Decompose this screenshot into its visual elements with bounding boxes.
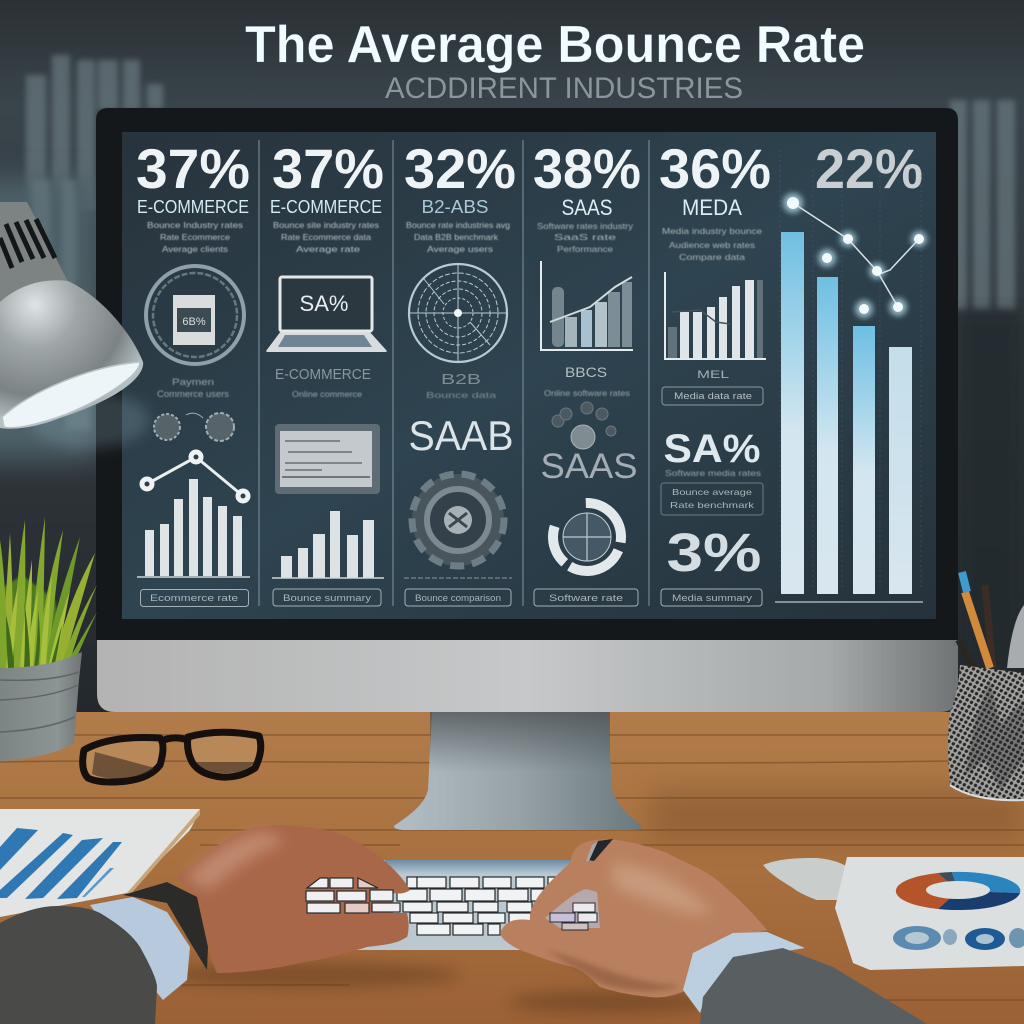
- mouse: [763, 858, 861, 900]
- icon: two globes: [154, 413, 234, 441]
- small text: Average rate: [296, 244, 360, 254]
- note box: Rate benchmark: [670, 500, 755, 510]
- small text: [273, 220, 379, 254]
- footer button: [273, 589, 381, 606]
- small text: Bounce site industry rates: [273, 220, 379, 230]
- small text: [406, 220, 510, 254]
- left sleeve: [0, 906, 157, 1024]
- note box: [661, 483, 763, 515]
- hand shadows: [160, 962, 710, 1014]
- right sleeve: [700, 948, 927, 1024]
- footer button: Media summary: [672, 593, 753, 603]
- axis line: [404, 577, 512, 579]
- monitor stand: [394, 712, 642, 830]
- shirt cuff: [90, 897, 190, 1000]
- small text: Bounce Industry rates: [147, 220, 243, 230]
- label: E-COMMERCE: [137, 197, 249, 217]
- icon: shield emblem: [552, 402, 616, 449]
- background wall: [0, 0, 1024, 720]
- icon: laptop: SA%: [300, 291, 348, 316]
- baseline: [775, 601, 923, 603]
- stat 36%: 36%: [659, 137, 771, 200]
- label: E-COMMERCE: [270, 197, 382, 217]
- title: The Average Bounce Rate: [245, 16, 865, 74]
- keys between fingers: [545, 889, 600, 930]
- caption: [275, 366, 371, 399]
- label: B2-ABS: [422, 197, 488, 217]
- small blue circles: [893, 926, 1024, 950]
- stat 32%: 32%: [404, 137, 516, 200]
- pencils: [958, 572, 993, 668]
- footer button: Bounce summary: [283, 593, 372, 603]
- stat 37%: 37%: [136, 137, 250, 200]
- caption and box: Media data rate: [674, 391, 752, 401]
- keys over fingers: [306, 878, 400, 913]
- keyboard: [345, 860, 600, 950]
- bar chart: [272, 511, 384, 578]
- desk lamp: [0, 202, 150, 448]
- big word: SAAB: [408, 412, 514, 459]
- hand highlight: [610, 864, 712, 914]
- subtitle: ACDDIRENT INDUSTRIES: [385, 72, 743, 105]
- small text: Compare data: [679, 252, 745, 262]
- caption: Bounce data: [426, 390, 496, 400]
- lamp glow: [30, 392, 150, 448]
- small text: Average clients: [162, 244, 228, 254]
- desk: [0, 712, 1024, 1024]
- caption: [544, 364, 630, 398]
- stat 3%: 3%: [666, 523, 762, 583]
- footer button: [140, 590, 248, 606]
- watch: [123, 882, 208, 970]
- pen cup: [948, 572, 1024, 800]
- paper with blue chart: [0, 809, 200, 917]
- small text: Rate Ecommerce data: [281, 232, 371, 242]
- lamp bulb: [2, 362, 140, 428]
- footer button: Ecommerce rate: [150, 593, 238, 603]
- column dividers: [259, 140, 649, 606]
- panel: column 3 b2-abs: [404, 137, 516, 606]
- small text: [147, 220, 243, 254]
- glasses shadow: [92, 752, 255, 778]
- caption and box: MEL: [697, 369, 729, 381]
- potted plant: [0, 517, 97, 761]
- panel: summary bar chart: [775, 137, 927, 602]
- right hand and sleeve: [500, 839, 927, 1024]
- donut chart: [896, 872, 1020, 910]
- panel: column 4 saas: [533, 137, 641, 606]
- monitor: [96, 108, 958, 712]
- bar chart: [665, 272, 766, 359]
- screen: [122, 132, 936, 619]
- panel: column 1 e-commerce: [136, 137, 250, 606]
- note box: Bounce average: [672, 487, 752, 497]
- label: MEDA: [682, 195, 742, 220]
- caption: [426, 371, 496, 400]
- stat 37%: 37%: [272, 137, 384, 200]
- small text: SaaS rate: [554, 232, 616, 242]
- caption: Online commerce: [292, 389, 362, 399]
- footer button: [405, 589, 511, 606]
- icon: ring with card: 6B%: [182, 316, 206, 328]
- note: Software media rates: [665, 468, 761, 478]
- small text: [537, 221, 634, 254]
- icon: donut: [552, 502, 622, 572]
- glasses: [83, 732, 261, 782]
- area bar chart: [541, 261, 633, 350]
- left hand: [177, 825, 410, 973]
- icon: document card: [275, 424, 380, 494]
- stat 38%: 38%: [533, 137, 641, 200]
- bars: [781, 232, 912, 594]
- small text: Media industry bounce: [662, 226, 762, 236]
- stat SA%: SA%: [664, 427, 760, 471]
- footer button: Software rate: [549, 593, 623, 603]
- small text: Software rates industry: [537, 221, 634, 231]
- icon: ring with card: [146, 266, 244, 364]
- grid lines: [780, 150, 921, 590]
- bar chart with line: [137, 452, 250, 577]
- small text: Rate Ecommerce: [160, 232, 230, 242]
- footer button: Bounce comparison: [415, 593, 501, 603]
- footer button: [661, 589, 762, 606]
- line with glowing nodes: [783, 193, 927, 318]
- left hand and sleeve: [0, 825, 410, 1024]
- caption and box: [662, 369, 763, 405]
- caption: B2B: [441, 371, 481, 388]
- small text: Audience web rates: [669, 240, 755, 250]
- monitor chin: [97, 640, 958, 712]
- stat 22%: 22%: [815, 137, 923, 200]
- silver object: [1007, 605, 1024, 668]
- caption: E-COMMERCE: [275, 366, 371, 383]
- caption: Online software rates: [544, 388, 630, 398]
- mesh cup: [948, 665, 1024, 800]
- ring: [588, 839, 613, 861]
- glasses lenses: [83, 732, 261, 782]
- caption: Paymen: [172, 377, 214, 387]
- small text: Average users: [427, 244, 493, 254]
- hand highlight: [185, 833, 281, 890]
- paper with donut chart: [835, 857, 1024, 970]
- small text: Performance: [557, 244, 613, 254]
- small text: [662, 226, 762, 262]
- hand shadow: [545, 950, 680, 991]
- icon: gear medallion: [412, 474, 504, 566]
- lamp vents: [0, 219, 55, 268]
- big word: SAAS: [540, 447, 638, 486]
- caption: Commerce users: [157, 389, 230, 399]
- footer button: [534, 589, 638, 606]
- label: SAAS: [562, 195, 612, 220]
- lamp neck: [0, 202, 68, 312]
- panel: column 2 e-commerce: [266, 137, 387, 606]
- panel: column 5 media: [659, 137, 771, 606]
- icon: radar globe: [409, 264, 507, 362]
- caption: [157, 377, 230, 399]
- icon: laptop: [266, 277, 387, 352]
- shirt cuff: [683, 932, 805, 1013]
- plant pot: [0, 652, 82, 761]
- right hand: [500, 839, 767, 997]
- glasses bridge: [160, 738, 188, 742]
- small text: Data B2B benchmark: [414, 232, 499, 242]
- caption: BBCS: [565, 364, 607, 380]
- monitor bezel: [96, 108, 958, 640]
- small text: Bounce rate industries avg: [406, 220, 510, 230]
- lamp dome: [0, 280, 143, 429]
